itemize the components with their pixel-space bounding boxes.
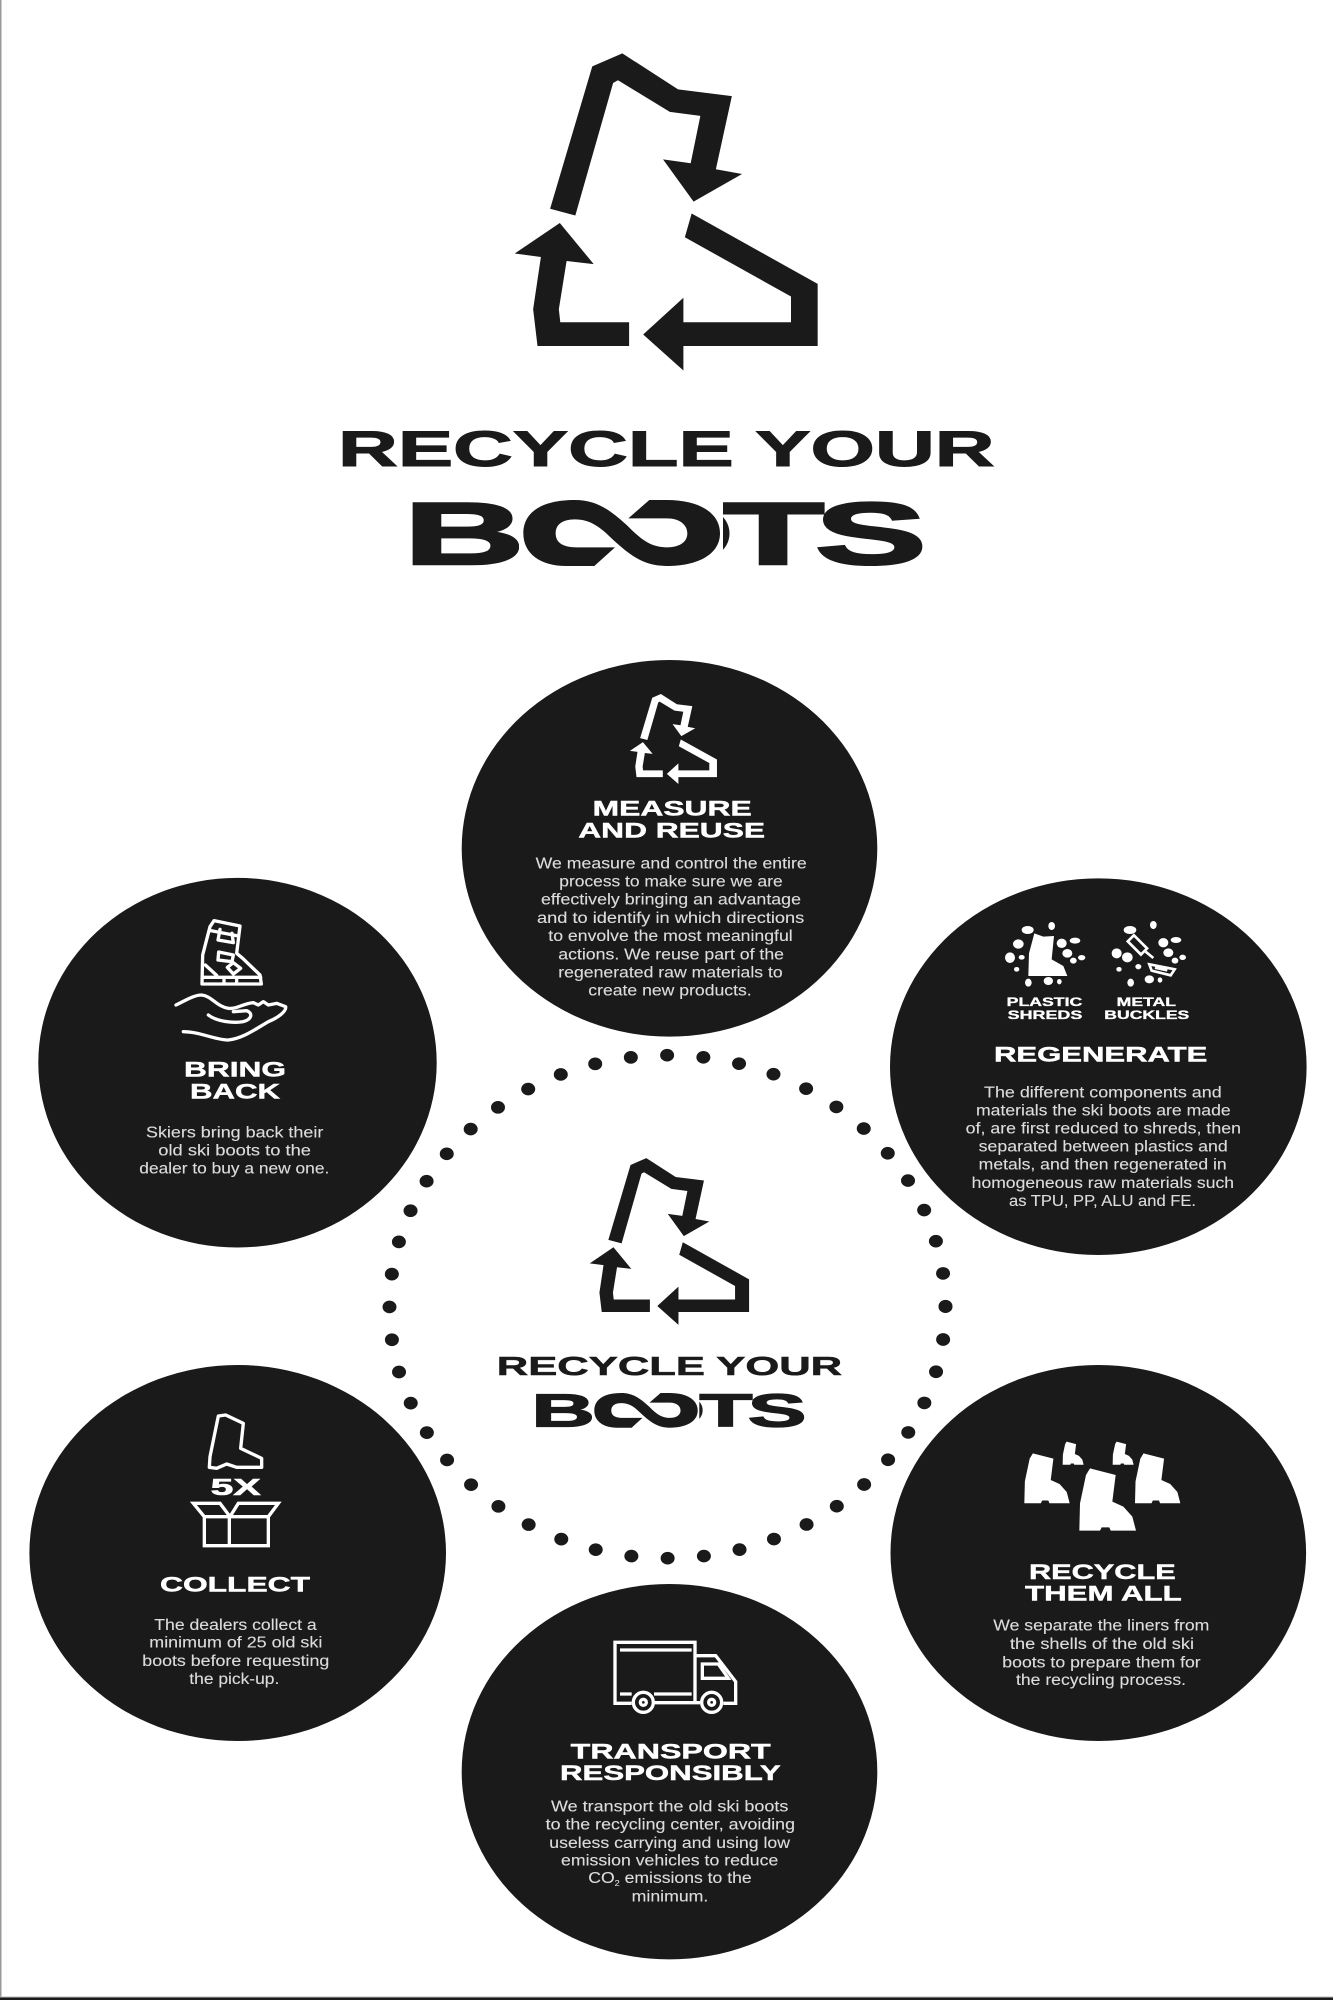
body text: measure and reuse: actions. We reuse part of the	[558, 946, 784, 963]
heading: measure and reuse: AND REUSE	[578, 819, 765, 842]
label: 5x: 5X	[211, 1474, 262, 1500]
heading: bring back	[184, 1059, 286, 1103]
body text: recycle them all	[993, 1618, 1209, 1689]
body text: transport responsibly: useless carrying and using low	[549, 1835, 791, 1852]
body text: measure and reuse: create new products.	[588, 983, 752, 1000]
body text: regenerate: separated between plastics and	[979, 1139, 1228, 1156]
panel: recycle them all	[891, 1365, 1306, 1741]
body text: measure and reuse: regenerated raw materials to	[558, 964, 783, 982]
central logo and title lockup	[497, 1158, 842, 1437]
body text: measure and reuse: effectively bringing an advantage	[541, 892, 801, 909]
body text: transport responsibly: We transport the old ski boots	[551, 1798, 789, 1815]
body text: regenerate: The different components and	[984, 1084, 1222, 1101]
body text: collect: boots before requesting	[142, 1653, 329, 1670]
icon: truck	[615, 1642, 736, 1712]
body text: regenerate: materials the ski boots are made	[976, 1102, 1231, 1119]
title: boots with infinity: BOOTS	[404, 485, 927, 583]
dotted ring around the central logo	[390, 1055, 946, 1558]
main logo and title lockup	[338, 53, 995, 583]
icon: recycling boot logo	[515, 53, 818, 370]
heading: transport responsibly: RESPONSIBLY	[560, 1762, 781, 1785]
heading: transport responsibly	[560, 1740, 781, 1785]
icon: open hand	[176, 995, 286, 1040]
body text: transport responsibly	[546, 1798, 795, 1906]
icon: central recycling boot logo	[590, 1158, 749, 1325]
label: plastic shreds	[1007, 997, 1083, 1022]
icon: white recycling boot	[630, 694, 717, 784]
heading: regenerate: REGENERATE	[994, 1043, 1207, 1066]
central title: recycle your: RECYCLE YOUR	[497, 1351, 842, 1381]
body text: recycle them all: the recycling process.	[1016, 1672, 1186, 1689]
heading: measure and reuse: MEASURE	[593, 798, 752, 821]
body text: measure and reuse: to envolve the most meaningful	[548, 928, 793, 945]
body text: regenerate: of, are first reduced to shreds, then	[966, 1120, 1241, 1138]
body text: collect	[142, 1617, 329, 1688]
title: recycle your: RECYCLE YOUR	[338, 421, 995, 477]
body text: bring back	[139, 1124, 329, 1178]
body text: transport responsibly: emissions to the	[620, 1870, 752, 1887]
icon: ski boot	[202, 921, 261, 984]
icon: plastic shreds	[1005, 922, 1085, 987]
icon: group of white boots	[1024, 1442, 1180, 1531]
body text: bring back: dealer to buy a new one.	[139, 1160, 329, 1178]
panel: transport responsibly	[462, 1584, 877, 1959]
body text: regenerate: metals, and then regenerated in	[979, 1157, 1227, 1174]
icon: boot outline	[209, 1415, 262, 1468]
body text: collect: minimum of 25 old ski	[149, 1634, 322, 1652]
panel: collect	[29, 1365, 446, 1741]
body text: recycle them all: We separate the liners from	[993, 1618, 1209, 1635]
label: metal buckles: BUCKLES	[1104, 1010, 1190, 1022]
heading: measure and reuse	[578, 798, 765, 842]
heading: bring back: BRING	[184, 1059, 286, 1082]
body text: measure and reuse: process to make sure we are	[559, 874, 783, 890]
body text: bring back: old ski boots to the	[158, 1142, 311, 1160]
panel: measure and reuse	[462, 660, 877, 1037]
body text: transport responsibly: 2	[615, 1879, 620, 1888]
body text: collect: the pick-up.	[189, 1671, 279, 1688]
body text: bring back: Skiers bring back their	[146, 1124, 323, 1141]
body text: regenerate: homogeneous raw materials such	[972, 1175, 1234, 1192]
icon: metal buckles	[1112, 921, 1186, 987]
heading: collect: COLLECT	[160, 1574, 310, 1597]
body text: measure and reuse: and to identify in which directions	[537, 910, 805, 927]
body text: measure and reuse: We measure and control the entire	[536, 855, 807, 872]
label: plastic shreds: SHREDS	[1008, 1010, 1083, 1022]
body text: transport responsibly: emission vehicles to reduce	[561, 1853, 778, 1870]
body text: recycle them all: boots to prepare them for	[1002, 1654, 1201, 1671]
panel: regenerate	[890, 878, 1307, 1255]
heading: transport responsibly: TRANSPORT	[571, 1740, 771, 1763]
label: plastic shreds: PLASTIC	[1007, 997, 1082, 1009]
body text: transport responsibly: to the recycling center, avoiding	[546, 1816, 795, 1833]
body text: measure and reuse	[536, 855, 807, 1000]
body text: transport responsibly: minimum.	[632, 1889, 708, 1906]
heading: recycle them all: THEM ALL	[1025, 1583, 1182, 1606]
heading: recycle them all	[1025, 1561, 1182, 1606]
body text: collect: The dealers collect a	[154, 1617, 317, 1634]
heading: bring back: BACK	[190, 1080, 280, 1103]
body text: transport responsibly: CO	[588, 1870, 612, 1887]
icon: open box	[193, 1503, 278, 1546]
panel: bring back	[38, 878, 437, 1248]
body text: regenerate	[966, 1084, 1241, 1210]
label: metal buckles: METAL	[1117, 997, 1176, 1009]
body text: recycle them all: the shells of the old ski	[1010, 1636, 1194, 1653]
central title: boots with infinity: BOOTS	[531, 1385, 806, 1437]
label: metal buckles	[1104, 997, 1190, 1022]
body text: regenerate: as TPU, PP, ALU and FE.	[1009, 1193, 1196, 1210]
heading: recycle them all: RECYCLE	[1029, 1561, 1176, 1584]
